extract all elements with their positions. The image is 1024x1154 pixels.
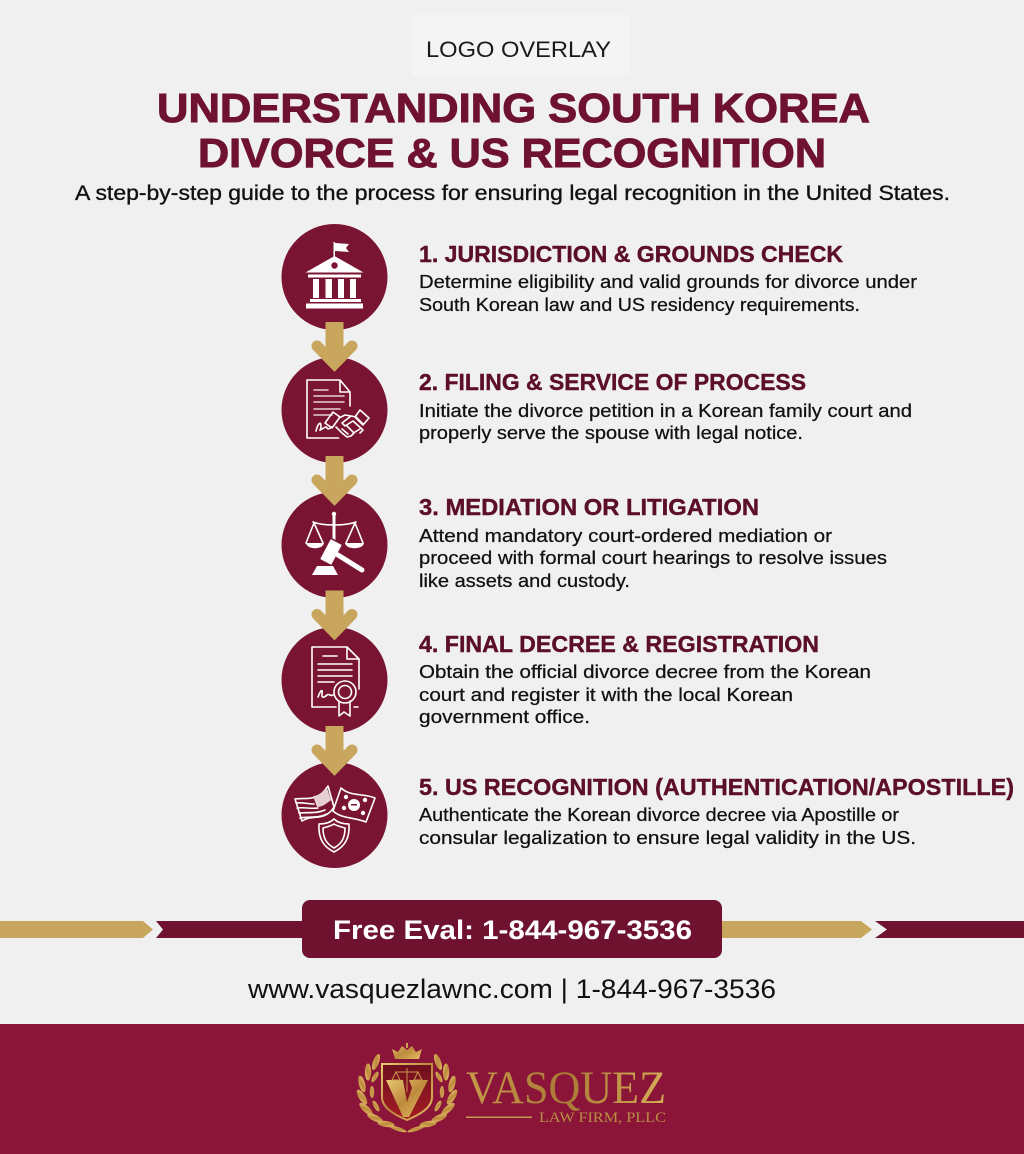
firm logo <box>355 1043 666 1134</box>
step 5 text <box>419 774 1014 848</box>
step 3 text <box>419 494 887 591</box>
footer band <box>0 1024 1024 1154</box>
website and phone: www.vasquezlawnc.com | 1-844-967-3536 <box>247 974 776 1004</box>
emblem: left wreath <box>355 1053 407 1134</box>
step 5 icon: flags and shield <box>282 762 388 868</box>
step 5 text: 5. US RECOGNITION (AUTHENTICATION/APOSTILLE) <box>419 774 1014 800</box>
call to action button: Free Eval: 1-844-967-3536 <box>333 915 692 945</box>
emblem: right wreath <box>407 1053 459 1134</box>
step 4 text: court and register it with the local Korean <box>419 684 793 705</box>
emblem: scales <box>392 1068 422 1092</box>
arrow 3 <box>317 590 352 632</box>
emblem: shield <box>382 1064 432 1120</box>
emblem: letter V <box>386 1080 428 1117</box>
step 1 text: 1. JURISDICTION & GROUNDS CHECK <box>419 241 843 267</box>
step 5 text: consular legalization to ensure legal validity in the US. <box>419 827 916 848</box>
step 5 text: Authenticate the Korean divorce decree via Apostille or <box>419 804 899 825</box>
step 3 text: 3. MEDIATION OR LITIGATION <box>419 494 759 520</box>
title <box>157 85 870 176</box>
step 4 text: Obtain the official divorce decree from the Korean <box>419 661 871 682</box>
step 1 text: Determine eligibility and valid grounds for divorce under <box>419 271 917 292</box>
step 4 icon: decree with seal <box>282 627 388 733</box>
step 2 icon: document and handshake <box>282 357 388 463</box>
step 4 text: 4. FINAL DECREE & REGISTRATION <box>419 631 819 657</box>
arrow 1 <box>317 322 352 364</box>
step 3 text: proceed with formal court hearings to resolve issues <box>419 547 887 568</box>
logo overlay placeholder <box>412 15 630 75</box>
logo overlay placeholder: LOGO OVERLAY <box>426 37 611 62</box>
wordmark: VASQUEZ <box>466 1062 666 1114</box>
step 2 text: Initiate the divorce petition in a Korean family court and <box>419 400 912 421</box>
arrow 4 <box>317 726 352 768</box>
step 2 text: 2. FILING & SERVICE OF PROCESS <box>419 369 806 395</box>
call to action button <box>302 900 722 958</box>
step 4 text: government office. <box>419 706 590 727</box>
step 1 text <box>419 241 917 315</box>
step 1 icon: courthouse <box>282 224 388 330</box>
subtitle: A step-by-step guide to the process for ensuring legal recognition in the United States. <box>75 182 950 205</box>
step 3 icon: scales and gavel <box>282 492 388 598</box>
step 1 text: South Korean law and US residency requirements. <box>419 294 860 315</box>
step 3 text: Attend mandatory court-ordered mediation or <box>419 525 832 546</box>
step 4 text <box>419 631 871 727</box>
ribbon band <box>0 921 1024 938</box>
step 2 text: properly serve the spouse with legal notice. <box>419 422 803 443</box>
arrow 2 <box>317 456 352 498</box>
firm logo: LAW FIRM, PLLC <box>539 1110 666 1126</box>
step 2 text <box>419 369 912 443</box>
emblem: crown <box>392 1043 422 1059</box>
step 3 text: like assets and custody. <box>419 570 630 591</box>
title: DIVORCE & US RECOGNITION <box>198 130 826 176</box>
title: UNDERSTANDING SOUTH KOREA <box>157 85 870 131</box>
